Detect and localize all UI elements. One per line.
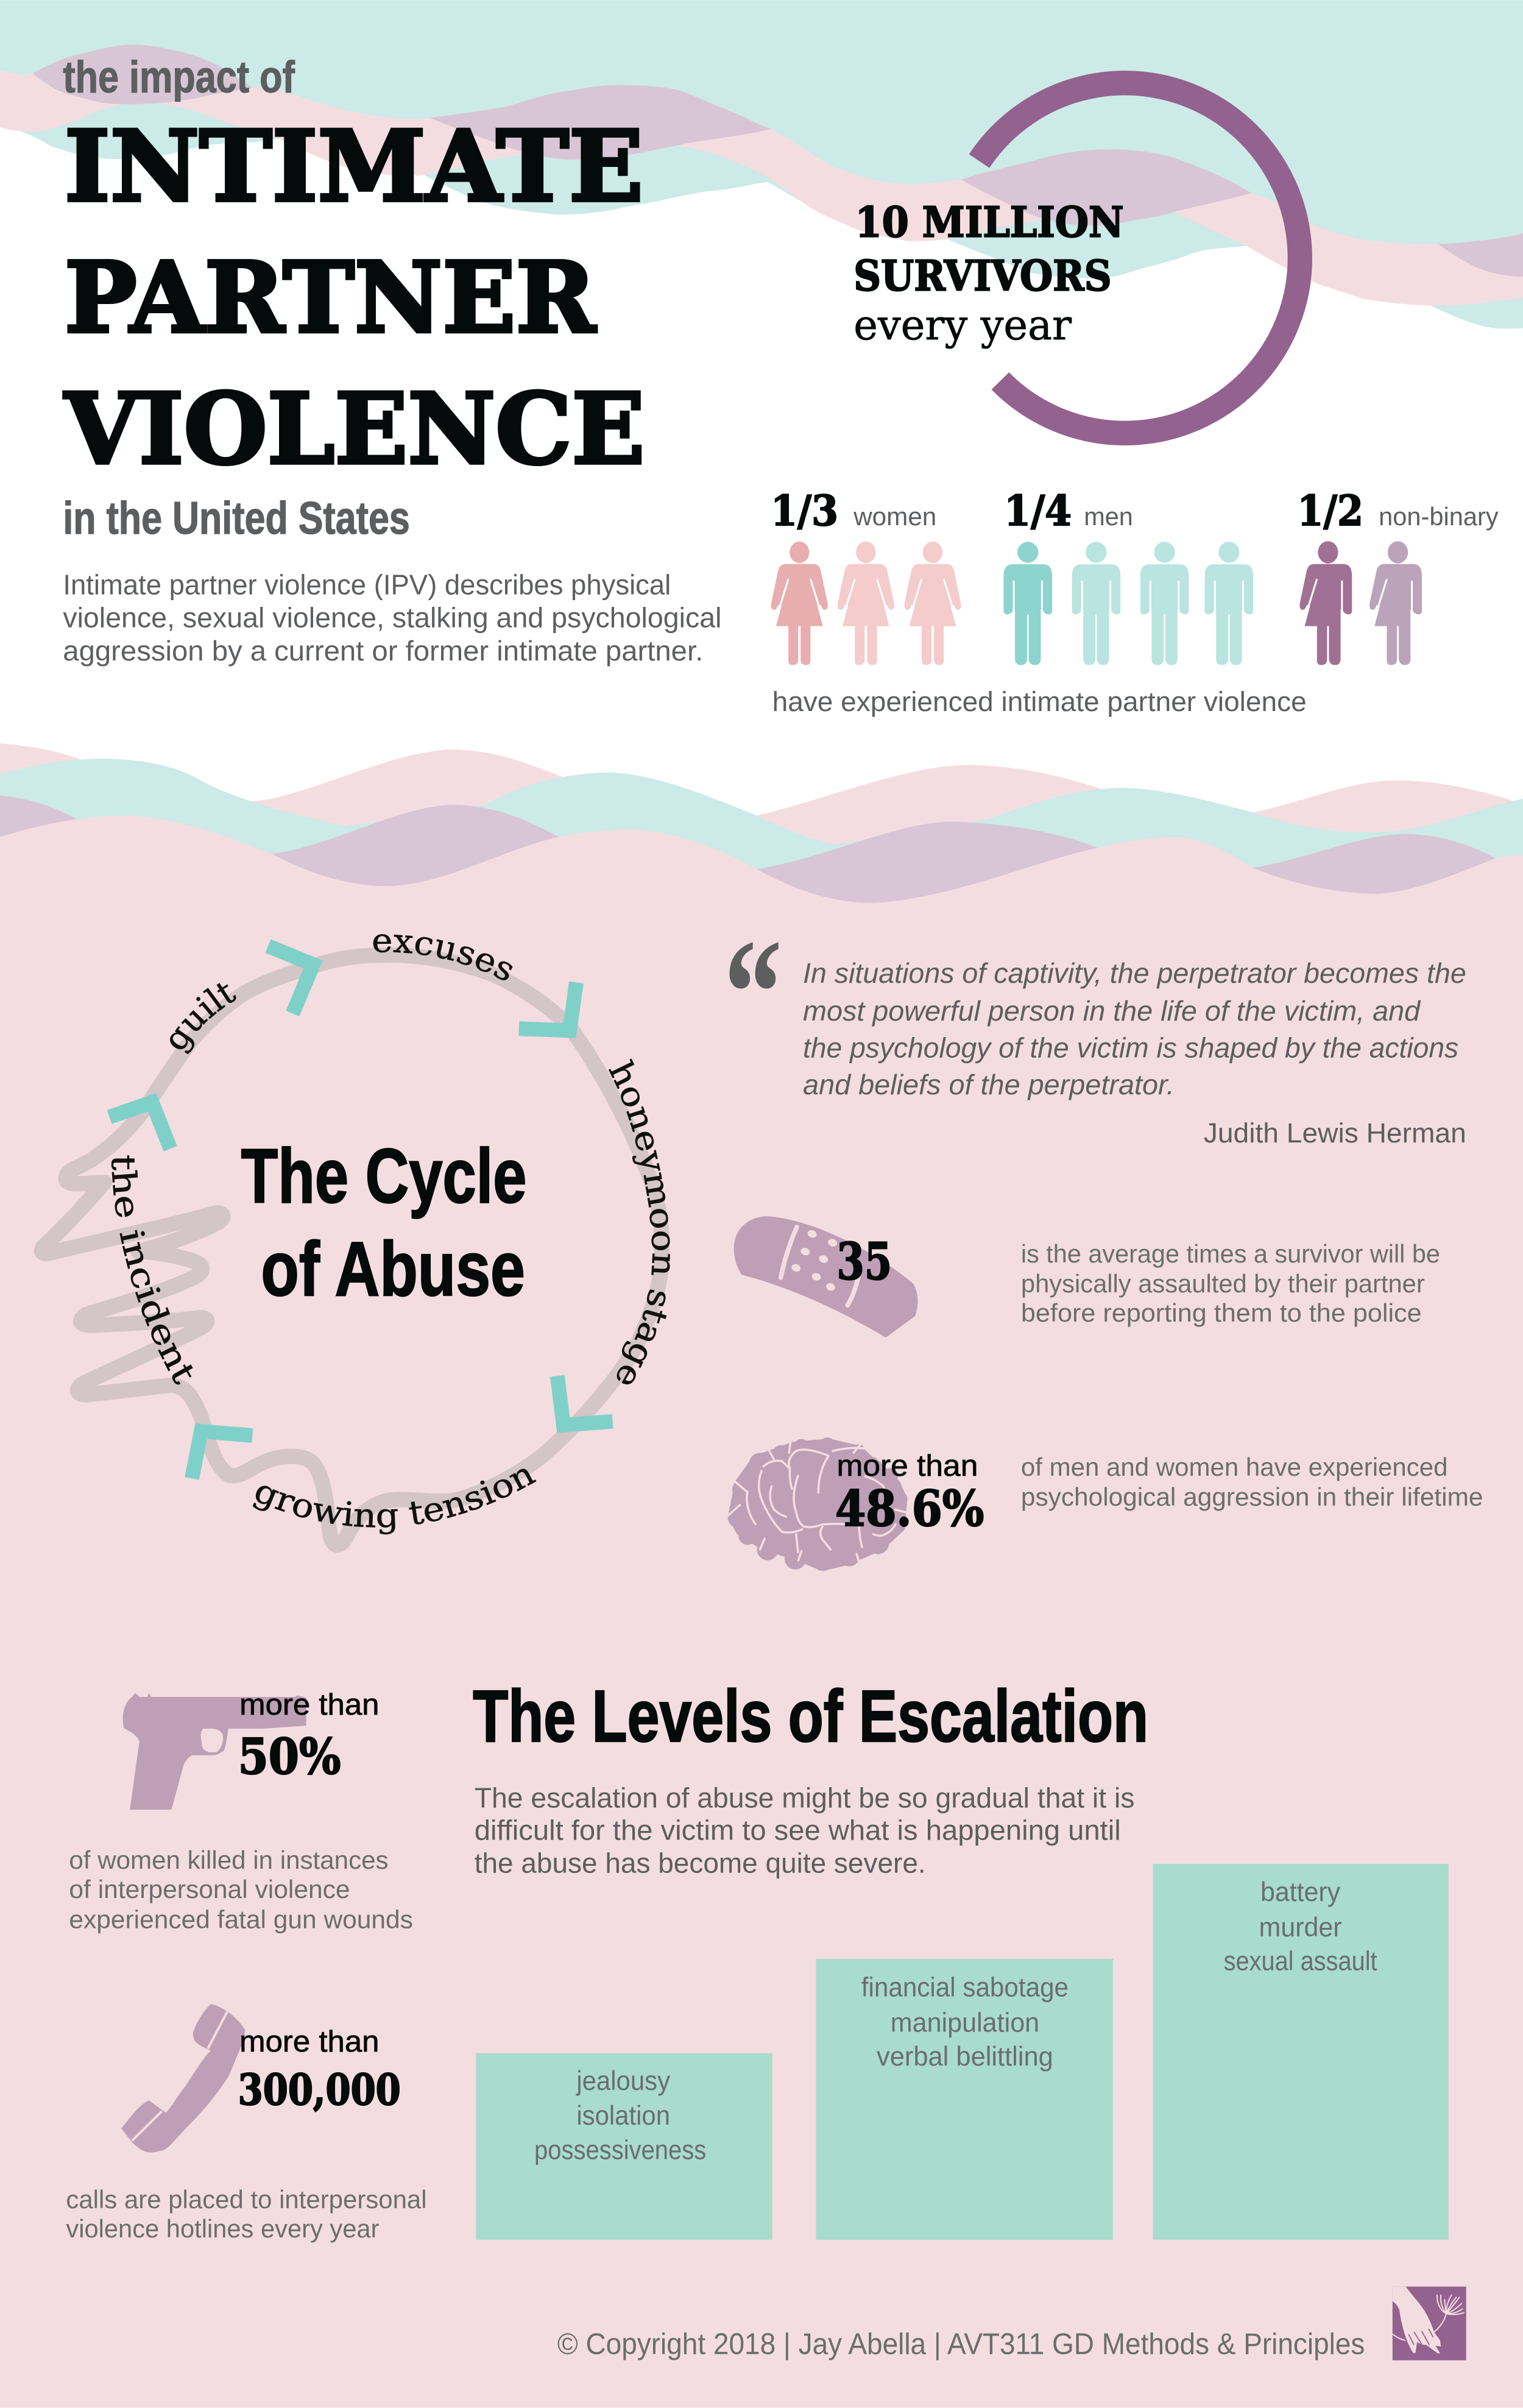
quotation text: most powerful person in the life of the victim, and: [803, 995, 1421, 1027]
figure: more than 300,000: more than: [239, 2025, 379, 2058]
escalation bar 2: verbal belittling: [877, 2042, 1053, 2072]
figure: more than 48.6%: 48.6%: [835, 1480, 984, 1538]
stat: 300,000 hotline calls: [66, 2004, 427, 2243]
quote attribution: Judith Lewis Herman: [1204, 1117, 1466, 1149]
cycle labels: guilt: [170, 983, 236, 1054]
icon: bandage: [734, 1216, 917, 1337]
quotation text: and beliefs of the perpetrator.: [803, 1069, 1175, 1100]
cycle arrows: [110, 946, 613, 1478]
title: intimate partner violence: PARTNER: [65, 241, 596, 355]
stat: 1/2 non-binary: [1298, 487, 1499, 665]
description: is the average times a survivor will be: [1021, 1239, 1440, 1268]
stat: 1/3 women: [771, 487, 961, 665]
stat: 1/3 women: 1/3: [771, 487, 838, 536]
description: of women killed in instances: [69, 1846, 389, 1874]
description: before reporting them to the police: [1021, 1298, 1422, 1327]
figure: 35: 35: [836, 1231, 892, 1291]
cycle of abuse diagram: [34, 934, 670, 1553]
subheading: in the United States: in the United States: [63, 493, 410, 544]
cycle ring: [41, 955, 662, 1545]
stat: 35 assaults: [734, 1216, 1440, 1337]
stat: 1/4 men: 1/4: [1004, 487, 1072, 536]
figure: more than 48.6%: [835, 1450, 984, 1538]
description: of interpersonal violence: [69, 1875, 350, 1903]
description: psychological aggression in their lifetime: [1021, 1482, 1483, 1511]
intro text block: Intimate partner violence (IPV) describes physical: [63, 568, 671, 600]
heading: the impact of: the impact of: [63, 52, 295, 102]
icon: logo hand with dandelion: [1393, 2287, 1466, 2360]
escalation bar 2: manipulation: [891, 2008, 1039, 2038]
intro text block: aggression by a current or former intimate partner.: [63, 635, 703, 667]
figure: more than 50%: 50%: [238, 1728, 341, 1786]
ring text: 10 MILLION: [855, 198, 1124, 247]
title: intimate partner violence: VIOLENCE: [64, 372, 645, 486]
stat: 1/2 non-binary: 1/2: [1298, 487, 1363, 536]
quote mark: “: [724, 907, 782, 1078]
escalation bar 3: battery: [1260, 1877, 1340, 1907]
description: experienced fatal gun wounds: [69, 1905, 413, 1933]
heading: levels of escalation: The Levels of Escalation: [473, 1674, 1148, 1757]
escalation bar 1: possessiveness: [534, 2136, 706, 2165]
description: physically assaulted by their partner: [1021, 1269, 1425, 1298]
escalation bar 1: [476, 2053, 772, 2240]
description: violence hotlines every year: [66, 2214, 380, 2243]
cycle title: [241, 1133, 526, 1312]
escalation bar 1: isolation: [576, 2101, 670, 2131]
description: [66, 2185, 427, 2243]
cycle title: of Abuse: [261, 1226, 525, 1312]
caption: have experienced: have experienced intimate partner violence: [772, 686, 1307, 717]
escalation intro: The escalation of abuse might be so gradual that it is: [475, 1782, 1134, 1813]
cycle labels: honeymoon stage: [608, 1058, 670, 1384]
title: intimate partner violence: [64, 109, 645, 486]
description: [69, 1846, 413, 1933]
cycle labels: the incident: [111, 1155, 193, 1384]
title: intimate partner violence: INTIMATE: [65, 109, 643, 224]
stat: 48.6% psychological aggression: [728, 1437, 1483, 1571]
quotation text: In situations of captivity, the perpetrator becomes the: [803, 957, 1466, 989]
escalation intro: the abuse has become quite severe.: [475, 1847, 926, 1879]
description: [1021, 1453, 1483, 1511]
figure: more than 300,000: 300,000: [238, 2064, 401, 2115]
escalation bar 3: [1153, 1864, 1449, 2240]
ring text: SURVIVORS: [853, 252, 1112, 301]
escalation bar 2: financial sabotage: [861, 1972, 1069, 2002]
intro text block: [63, 568, 721, 667]
quotation text: [803, 957, 1466, 1100]
escalation bar 2: [816, 1959, 1113, 2240]
escalation bar 1: jealousy: [575, 2066, 670, 2096]
stat: 1/2 non-binary: non-binary: [1379, 502, 1499, 531]
figure: more than 50%: [238, 1688, 379, 1786]
stat: 1/3 women: women: [853, 502, 936, 531]
ring: 10 million survivors: [853, 83, 1300, 433]
escalation intro: [475, 1782, 1134, 1879]
stat: 1/4 men: men: [1084, 502, 1133, 531]
divider waves and pink background: [0, 743, 1523, 2408]
icon: gun: [123, 1693, 306, 1810]
icon: brain: [728, 1437, 907, 1571]
stat: 1/4 men: [1003, 487, 1253, 665]
figure: more than 50%: more than: [239, 1688, 379, 1721]
figure: more than 300,000: [238, 2025, 401, 2115]
cycle labels: growing tension: [252, 1468, 536, 1534]
figure: more than 48.6%: more than: [836, 1450, 978, 1482]
description: of men and women have experienced: [1021, 1453, 1448, 1481]
escalation bar 3: sexual assault: [1224, 1947, 1377, 1977]
description: calls are placed to interpersonal: [66, 2185, 427, 2214]
cycle title: The Cycle: [241, 1133, 526, 1219]
description: [1021, 1239, 1440, 1327]
cycle labels: excuses: [373, 934, 513, 980]
icon: phone: [121, 2004, 245, 2153]
ring text: every year: [853, 302, 1072, 350]
cycle labels: [111, 934, 670, 1534]
quotation text: the psychology of the victim is shaped by the actions: [803, 1032, 1458, 1063]
stat: 50% gun wounds: [69, 1688, 413, 1933]
escalation intro: difficult for the victim to see what is happening until: [475, 1814, 1121, 1846]
escalation bar 3: murder: [1259, 1913, 1342, 1942]
ring text: [853, 198, 1124, 350]
copyright footer: © Copyright 2018 | Jay Abella | AVT311 GD Methods & Principles: [557, 2328, 1365, 2361]
top background waves: [0, 0, 1523, 328]
intro text block: violence, sexual violence, stalking and psychological: [63, 602, 721, 634]
